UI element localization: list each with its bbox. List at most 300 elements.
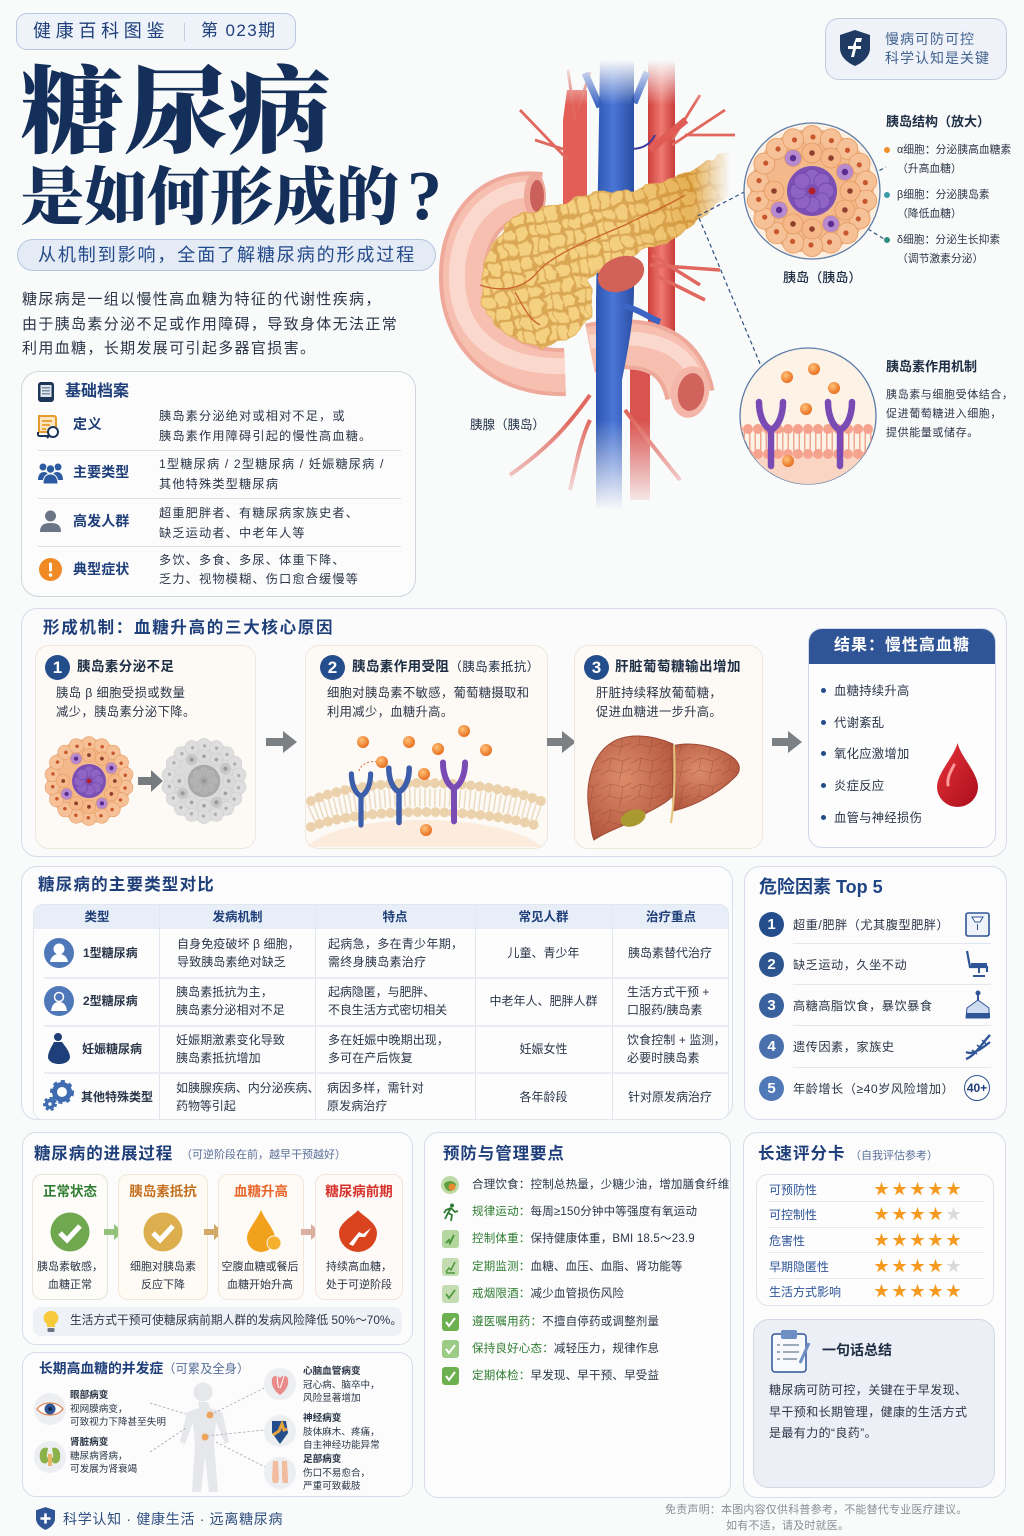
foot text: 严重可致截肢 [303,1481,361,1492]
foot text: 伤口不易愈合， [303,1468,370,1478]
eye text: 眼部病变 [70,1390,108,1401]
nerve text: 自主神经功能异常 [303,1440,380,1451]
score: lifestyle impact: 生活方式影响 [769,1285,841,1299]
icon: blood drop [937,743,978,807]
stage text: 反应下降 [141,1278,185,1290]
insulin mechanism note [886,359,1014,439]
type 1 details [177,937,300,968]
islet magnified circle [744,123,880,259]
gestational name: 妊娠糖尿病 [82,1042,142,1056]
panel: type comparison [21,866,733,1120]
risk 4: 4 [767,1038,776,1055]
badge 3 [584,655,609,680]
risk 1 [759,912,997,938]
other types details: 药物等引起 [176,1098,236,1112]
eye text [70,1389,166,1430]
gestational details: 胰岛素抵抗增加 [176,1050,261,1064]
icon: red broken drop [339,1210,377,1252]
stage text: 处于可逆阶段 [326,1278,392,1290]
arrow 2 [547,731,574,753]
item: exercise [440,1203,730,1221]
icon: scale [965,912,990,937]
arrow 3 [772,731,802,753]
stage: normal [32,1174,108,1300]
top right badge [825,18,1007,80]
text: 保持良好心态：减轻压力，规律作息 [472,1343,659,1355]
text: 规律运动：每周≥150分钟中等强度有氧运动 [472,1206,697,1218]
result list: 代谢紊乱 [834,716,884,730]
arrow 1 [266,731,297,753]
red lump on the pancreas head [592,249,650,299]
panel: complications [22,1352,413,1497]
row: gestational: 多可在产后恢复 [328,1050,413,1064]
item: mindset [440,1340,730,1358]
stage title: 正常状态 [43,1184,97,1199]
card 2 [305,645,548,849]
insulin action circle [738,348,878,485]
badge 2: 2 [328,658,337,677]
heart text [303,1365,380,1406]
row: type 1: 起病急，多在青少年期， [328,937,463,951]
text: symptoms: 多饮、多食、多尿、体重下降、 [159,553,346,567]
row: type 2: 中老年人、肥胖人群 [489,994,598,1008]
heart text: 冠心病、脑卒中， [303,1380,380,1390]
icon: nerve [264,1415,296,1447]
panel: scorecard [743,1132,1006,1498]
text: 控制体重：保持健康体重，BMI 18.5～23.9 [472,1233,695,1245]
icon: cake [965,990,991,1018]
profile heading: 基础档案 [65,383,129,400]
main vein [596,60,660,510]
icon: green check [50,1212,90,1252]
card 2 title: 胰岛素作用受阻（胰岛素抵抗） [352,659,540,674]
pancreas caption: 胰腺（胰岛） [470,418,545,432]
badge text: 科学认知是关键 [885,50,990,66]
score: early concealment [757,1257,993,1277]
result card [808,628,996,848]
row: type 1 [44,937,712,968]
body diagram [143,1381,293,1493]
item: weight [440,1230,730,1248]
badge 1: 1 [53,658,62,677]
stage title: 糖尿病前期 [325,1184,393,1199]
prevention heading: 预防与管理要点 [443,1145,565,1163]
risk 2 [759,952,997,978]
icon: weight [442,1230,459,1248]
panel: progression [22,1132,413,1345]
risk 2: 缺乏运动，久坐不动 [793,958,907,972]
card 3 text: 肝脏持续释放葡萄糖， [596,686,722,700]
table header [34,905,730,929]
card 3 text: 促进血糖进一步升高。 [596,705,722,719]
complications heading: 长期高血糖的并发症（可累及全身） [39,1361,249,1376]
tip text: 生活方式干预可使糖尿病前期人群的发病风险降低 50%～70%。 [70,1314,402,1327]
text: definition: 胰岛素分泌绝对或相对不足，或 [159,409,346,423]
comparison table [33,904,729,1120]
alpha cell [884,144,1011,175]
duodenum [457,173,713,421]
mechanism note body: 胰岛素与细胞受体结合， [886,389,1014,401]
foot text [303,1453,370,1494]
stage text: 持续高血糖， [326,1261,392,1273]
icon: people [38,464,63,484]
alpha cell: α细胞：分泌胰高血糖素 [897,144,1011,156]
text: high-risk group: 缺乏运动者、中老年人等 [159,526,306,540]
card 3 title: 肝脏葡萄糖输出增加 [615,659,741,674]
type 1 name: 1型糖尿病 [83,946,138,960]
blood vessels upper [510,60,735,500]
label: main types: 主要类型 [73,464,129,480]
mechanism heading: 形成机制：血糖升高的三大核心原因 [43,619,334,637]
item: smoking [440,1285,730,1303]
row: type 1: 胰岛素替代治疗 [628,946,712,960]
main title [20,60,442,235]
text: main types: 1型糖尿病 / 2型糖尿病 / 妊娠糖尿病 / [159,457,385,471]
anatomical illustration [439,62,886,506]
row: type 2: 不良生活方式密切相关 [328,1002,447,1016]
row: other types [34,1074,730,1121]
badge 3: 3 [592,658,601,677]
icon: person [40,510,61,532]
icon: pregnant woman [48,1033,70,1064]
nerve complication [264,1412,404,1456]
icon: age 40+ [964,1075,990,1101]
risk 2: 2 [767,956,776,973]
score: harm: ★★★★★ [874,1232,964,1249]
risk 3: 高糖高脂饮食，暴饮暴食 [793,999,933,1013]
islet legend [884,114,1011,265]
stage text: 胰岛素敏感， [37,1261,103,1273]
icon: footer shield [36,1507,55,1530]
table header: 特点 [382,910,408,924]
footer slogan [36,1506,288,1532]
summary title: 一句话总结 [822,1342,892,1358]
mechanism note body: 提供能量或储存。 [886,427,979,439]
icon: kidneys [34,1441,66,1473]
text: symptoms: 乏力、视物模糊、伤口愈合缓慢等 [159,572,359,586]
icon: light bulb [42,1310,60,1333]
type 2 details [176,985,285,1016]
card 1 [35,645,256,849]
risk 1: 超重/肥胖（尤其腹型肥胖） [793,918,949,932]
pancreas [480,150,732,348]
kidney text: 可发展为肾衰竭 [70,1464,137,1475]
icon: warning [39,558,62,581]
stage text [119,1259,207,1294]
progression heading: 糖尿病的进展过程 [34,1145,173,1163]
score table [756,1174,994,1306]
item: monitoring [440,1258,730,1276]
score: preventable: ★★★★★ [874,1181,964,1198]
panel: risk factors [744,866,1007,1120]
text: definition [159,409,372,442]
other types details: 如胰腺疾病、内分泌疾病、 [176,1081,319,1095]
delta cell: δ细胞：分泌生长抑素 [897,234,1000,246]
badge 1 [45,655,70,680]
badge text: 慢病可防可控 [885,31,975,47]
type 2 name: 2型糖尿病 [83,994,138,1008]
illustration: liver [587,736,740,841]
slogan text: 科学认知 · 健康生活 · 远离糖尿病 [63,1511,283,1527]
risk 4: 遗传因素，家族史 [793,1040,894,1054]
score: lifestyle impact [757,1282,993,1302]
label: definition: 定义 [73,416,102,432]
intro paragraph [22,291,398,357]
text: high-risk group [159,506,359,540]
icon: check [442,1313,459,1331]
kidney text: 肾脏病变 [70,1437,108,1448]
stage: prediabetes [315,1174,403,1300]
risk 4 [759,1034,997,1060]
stage title: 血糖升高 [234,1184,288,1199]
risk heading: 危险因素 Top 5 [759,877,883,897]
text: main types [159,457,385,490]
intro paragraph: 糖尿病是一组以慢性高血糖为特征的代谢性疾病， [22,291,382,308]
mechanism note heading: 胰岛素作用机制 [886,359,977,374]
text: 戒烟限酒：减少血管损伤风险 [472,1288,624,1300]
islet heading: 胰岛结构（放大） [886,114,990,129]
result heading: 结果：慢性高血糖 [834,637,970,654]
title line 2: 是如何形成的? [21,158,442,235]
scorecard note: （自我评估参考） [850,1150,938,1162]
icon: shield [840,30,870,66]
row: other types: 病因多样，需针对 [327,1081,424,1095]
stage: resistance [118,1174,208,1300]
subtitle pill [17,239,436,271]
panel: prevention [424,1132,731,1498]
score: controllable: 可控制性 [769,1208,817,1222]
text: 合理饮食：控制总热量，少糖少油，增加膳食纤维 [472,1179,729,1191]
score: preventable [757,1180,993,1200]
icon: no smoking [442,1285,459,1303]
score: controllable: ★★★★★ [874,1206,964,1223]
panel: formation mechanism [21,608,1007,857]
row: gestational: 必要时胰岛素 [627,1050,700,1064]
comparison heading: 糖尿病的主要类型对比 [38,876,215,894]
card 1 title: 胰岛素分泌不足 [77,659,174,674]
delta cell [884,234,1000,265]
icon: gold check [143,1212,183,1252]
tip bar [33,1307,402,1336]
beta cell [884,188,990,220]
row: type 1: 需终身胰岛素治疗 [328,954,426,968]
illustration: healthy to damaged islet [44,736,246,826]
heart text: 心脑血管病变 [303,1366,361,1377]
icon: monitor [442,1258,459,1276]
risk 5: 5 [767,1080,776,1097]
result list: 血管与神经损伤 [834,811,922,825]
table header: 发病机制 [212,910,262,924]
result list: 血糖持续升高 [834,684,910,698]
risk 5: 年龄增长（≥40岁风险增加） [793,1082,954,1096]
series name: 健康百科图鉴 [33,21,169,41]
row: type 1: 儿童、青少年 [507,946,580,960]
item: diet [440,1176,730,1194]
badge text [885,31,990,66]
icon: clipboard tablet [38,382,54,402]
text: 定期监测：血糖、血压、血脂、肾功能等 [472,1261,683,1273]
stage text: 空腹血糖或餐后 [222,1261,298,1273]
arrow: stage 3 [301,1224,320,1240]
stage text: 血糖正常 [48,1278,92,1290]
result heading [809,629,995,664]
row: gestational: 多在妊娠中晚期出现， [328,1033,449,1047]
text: symptoms [159,553,359,586]
mechanism note body [886,388,1014,439]
card 3 [574,645,763,849]
nerve text [303,1412,380,1452]
type 2 details: 胰岛素抵抗为主， [176,985,273,999]
text: 定期体检：早发现、早干预、早受益 [472,1370,659,1382]
nerve text: 肢体麻木、疼痛， [303,1426,380,1438]
icon: runner [441,1203,459,1221]
stage text [316,1259,402,1294]
text: definition: 胰岛素作用障碍引起的慢性高血糖。 [159,428,372,442]
summary text: 糖尿病可防可控，关键在于早发现、 [769,1383,967,1397]
row: gestational: 饮食控制 + 监测， [627,1033,726,1047]
result list: 炎症反应 [834,779,884,793]
beta cell: （降低血糖） [897,208,962,220]
icon: check green [442,1367,459,1385]
alpha cell: （升高血糖） [897,163,962,175]
score: harm: 危害性 [769,1234,805,1248]
stage text [33,1259,107,1294]
icon: definition [37,415,59,439]
card 2 text: 利用减少，血糖升高。 [327,705,453,719]
other types details [176,1080,319,1115]
arrow: stage 2 [204,1224,223,1240]
text: 遵医嘱用药：不擅自停药或调整剂量 [472,1316,659,1328]
icon: chair [965,949,990,978]
heart text: 风险显著增加 [303,1393,361,1404]
risk 3 [759,993,997,1019]
table header: 常见人群 [518,910,568,924]
icon: amber drops [247,1210,281,1252]
label: symptoms: 典型症状 [73,561,129,577]
stage: rising glucose [218,1174,304,1300]
intro paragraph: 利用血糖，长期发展可引起多器官损害。 [22,340,316,357]
gestational details [176,1032,285,1067]
icon: type 1 person [44,938,74,968]
foot complication [264,1453,404,1497]
icon: eye [34,1393,66,1425]
row: gestational: 妊娠女性 [519,1042,568,1056]
row: other types: 各年龄段 [519,1090,568,1104]
card 1 text: 减少，胰岛素分泌下降。 [56,705,196,719]
icon: clipboard [771,1329,811,1373]
summary text: 早干预和长期管理，健康的生活方式 [769,1404,967,1418]
header tag [16,13,296,50]
disclaimer: 免责声明：本图内容仅供科普参考，不能替代专业医疗建议。 [665,1504,967,1516]
kidney text [70,1436,137,1476]
text: high-risk group: 超重肥胖者、有糖尿病家族史者、 [159,506,359,520]
panel: basic profile [21,371,416,597]
score: preventable: 可预防性 [769,1183,817,1197]
result list [821,684,922,825]
row: type 2: 生活方式干预 + [627,985,709,999]
summary text [769,1380,967,1444]
icon: food [440,1176,460,1194]
icon: age 40+: 40+ [967,1081,987,1095]
type 2 details: 胰岛素分泌相对不足 [176,1002,285,1016]
stage text: 血糖开始升高 [227,1278,293,1290]
eye text: 可致视力下降甚至失明 [70,1417,166,1428]
icon: heart [264,1368,296,1400]
row: type 2: 起病隐匿，与肥胖、 [328,985,435,999]
kidney complication [33,1436,173,1482]
badge 2 [320,655,345,680]
card 1 text: 胰岛 β 细胞受损或数量 [56,686,185,700]
stage text: 细胞对胰岛素 [130,1261,196,1273]
scorecard heading: 长速评分卡 [758,1145,846,1163]
stage title: 胰岛素抵抗 [129,1184,197,1199]
eye text: 视网膜病变， [70,1404,128,1414]
text: main types: 其他特殊类型糖尿病 [159,476,279,490]
risk 1: 1 [767,916,776,933]
table header: 治疗重点 [646,910,696,924]
beta cell: β细胞：分泌胰岛素 [897,189,990,201]
eye complication [33,1389,173,1435]
row: other types: 针对原发病治疗 [628,1090,712,1104]
summary text: 是最有力的“良药”。 [769,1426,877,1440]
delta cell: （调节激素分泌） [897,253,983,265]
arrow: stage 1 [104,1224,123,1240]
icon: check light [442,1340,459,1358]
score: early concealment: ★★★★★ [874,1258,964,1275]
stage text [218,1259,302,1294]
nerve text: 神经病变 [303,1413,341,1424]
risk 3: 3 [767,997,776,1014]
item: checkup [440,1367,730,1385]
disclaimer: 如有不适，请及时就医。 [726,1520,849,1532]
row: type 2: 口服药/胰岛素 [627,1002,702,1016]
issue number: 第 023期 [201,21,276,40]
row: other types: 原发病治疗 [327,1098,388,1112]
table header: 类型 [84,910,110,924]
type 1 details: 自身免疫破坏 β 细胞， [177,937,300,951]
label: high-risk group: 高发人群 [73,513,129,529]
result list: 氧化应激增加 [834,747,910,761]
progression note: （可逆阶段在前，越早干预越好） [181,1149,346,1161]
card 2 text [327,686,529,719]
card 3 text [596,686,722,719]
gestational details: 妊娠期激素变化导致 [176,1033,285,1047]
subtitle pill: 从机制到影响，全面了解糖尿病的形成过程 [38,245,416,265]
other types name: 其他特殊类型 [81,1090,153,1104]
row: gestational [48,1033,726,1064]
icon: gears [43,1081,74,1111]
icon: type 2 person [44,986,74,1016]
score: lifestyle impact: ★★★★★ [874,1283,964,1300]
heart complication [264,1365,404,1409]
row: type 2 [44,985,709,1016]
summary box [753,1319,995,1488]
score: early concealment: 早期隐匿性 [769,1260,829,1274]
foot text: 足部病变 [303,1454,341,1465]
kidney text: 糖尿病肾病， [70,1450,128,1462]
intro paragraph: 由于胰岛素分泌不足或作用障碍，导致身体无法正常 [22,316,398,333]
card 1 text [56,686,196,719]
risk 5 [759,1076,997,1102]
connector lines [698,167,886,366]
illustration: insulin resistance membrane [306,725,546,847]
card 2 text: 细胞对胰岛素不敏感，葡萄糖摄取和 [327,686,529,700]
title line 1: 糖尿病 [20,60,331,166]
score: controllable [757,1205,993,1225]
score: harm [757,1231,993,1251]
islet caption: 胰岛（胰岛） [783,270,862,285]
icon: foot [264,1457,296,1489]
